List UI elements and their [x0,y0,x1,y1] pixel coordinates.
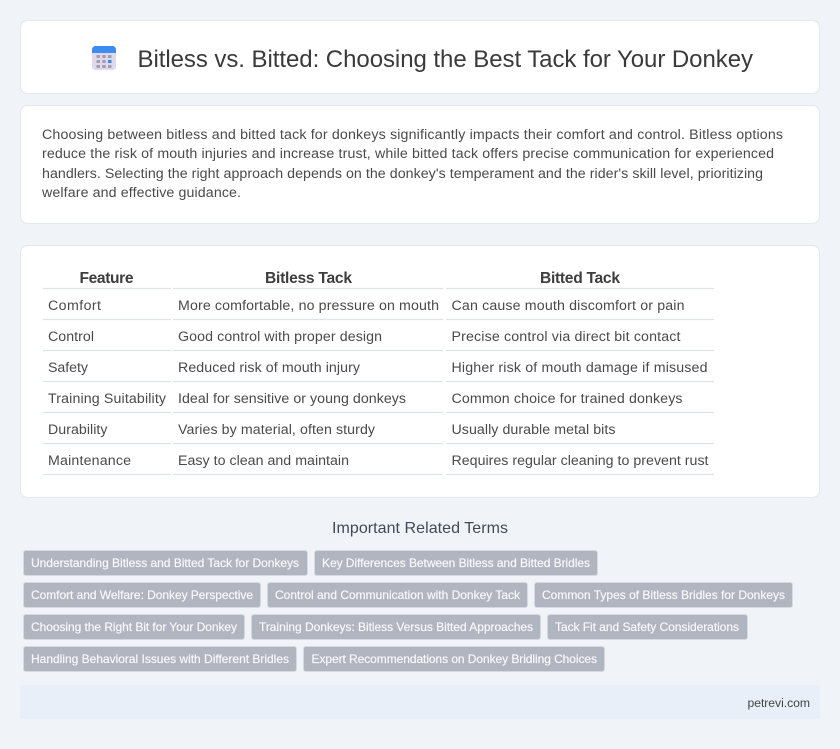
tag [534,582,792,608]
row: training suitability: Training Suitability [48,391,167,407]
tag list: related terms [24,550,792,672]
row: maintenance: Requires regular cleaning to prevent rust [452,453,709,469]
tag: Expert Recommendations on Donkey Bridling Choices [312,652,597,666]
table header: Bitted Tack [540,270,620,287]
tag: Common Types of Bitless Bridles for Donkeys [542,588,785,602]
tag: Key Differences Between Bitless and Bitted Bridles [322,556,590,570]
tag: Understanding Bitless and Bitted Tack for Donkeys [31,556,299,570]
heading: related terms: Important Related Terms [332,520,508,537]
row: safety: Safety [48,360,89,376]
row: durability [48,422,616,438]
tag [24,646,296,672]
row: maintenance: Easy to clean and maintain [178,453,349,469]
row: control: Good control with proper design [178,329,382,345]
row: safety [48,360,708,376]
tag [548,614,748,640]
row: control [48,329,681,345]
text block: introduction: Choosing between bitless and bitted tack for donkeys significantly impacts their comfort and control. Bitless options [42,127,783,143]
row: maintenance [48,453,709,469]
row: training suitability: Ideal for sensitive or young donkeys [178,391,406,407]
row: safety: Reduced risk of mouth injury [178,360,361,376]
table header: Feature [80,270,134,287]
text block: introduction: welfare and effective guidance. [41,185,241,201]
row: training suitability: Common choice for trained donkeys [452,391,682,407]
tag: Comfort and Welfare: Donkey Perspective [31,588,253,602]
row: control: Control [48,329,94,345]
tag: Handling Behavioral Issues with Different Bridles [31,652,289,666]
footer [20,685,820,719]
panel: introduction [20,106,820,224]
tag [314,550,598,576]
row: control: Precise control via direct bit contact [452,329,681,345]
row: durability: Usually durable metal bits [452,422,616,438]
title: Bitless vs. Bitted: Choosing the Best Tack for Your Donkey [138,46,753,73]
tag [268,582,528,608]
tag [252,614,540,640]
row: comfort: More comfortable, no pressure on mouth [178,298,439,314]
tag [24,582,260,608]
row: maintenance: Maintenance [48,453,131,469]
tag [304,646,604,672]
tag: Control and Communication with Donkey Tack [275,588,521,602]
tag: Training Donkeys: Bitless Versus Bitted Approaches [259,620,533,634]
text block: introduction: handlers. Selecting the right approach depends on the donkey's temperament and the rider's skill level, prioritizing [42,166,763,182]
row: durability: Durability [48,422,108,438]
icon: calendar [92,46,116,70]
footer source: petrevi.com [748,696,810,710]
panel: comparison table [20,246,820,498]
row: comfort [48,298,684,314]
row: training suitability [48,391,682,407]
row: comfort: Can cause mouth discomfort or pain [452,298,684,314]
table header: Bitless Tack [265,270,352,287]
row: safety: Higher risk of mouth damage if misused [452,360,708,376]
tag: Tack Fit and Safety Considerations [555,620,739,634]
row: durability: Varies by material, often sturdy [178,422,376,438]
text block: introduction [41,127,783,201]
row: comfort: Comfort [48,298,101,314]
table header [80,270,620,287]
tag [24,550,308,576]
tag [24,614,244,640]
tag: Choosing the Right Bit for Your Donkey [31,620,237,634]
text block: introduction: reduce the risk of mouth injuries and increase trust, while bitted tack offers precise communication for experienced [42,146,774,162]
panel: header [20,20,820,94]
